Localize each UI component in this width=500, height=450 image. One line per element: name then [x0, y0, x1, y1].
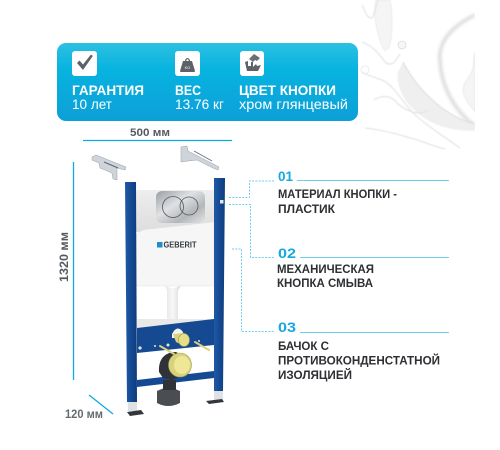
milk splash decoration — [361, 0, 475, 149]
callout 03: 03 — [278, 319, 296, 335]
callout 03: ИЗОЛЯЦИЕЙ — [278, 369, 352, 382]
callout 01 — [278, 168, 449, 216]
dimension: height 1320 mm: 1320 мм — [57, 232, 71, 282]
installation frame illustration — [92, 146, 225, 416]
black elbow — [159, 352, 187, 380]
heading: button colour — [239, 82, 348, 112]
callout 02: МЕХАНИЧЕСКАЯ — [277, 264, 374, 276]
tank body — [136, 222, 214, 286]
flush button plate — [156, 191, 205, 223]
callout 01: 01 — [278, 168, 293, 184]
wall bracket right — [181, 146, 219, 170]
yellow inlet fitting — [172, 328, 190, 346]
frame upper crossbar — [137, 319, 214, 353]
callout 03: ПРОТИВОКОНДЕНСТАТНОЙ — [278, 354, 440, 368]
callout 02 — [277, 245, 449, 290]
Geberit logo: GEBERIT — [164, 240, 197, 250]
dimension: width 500 mm: 500 мм — [130, 127, 170, 139]
yellow outlet fitting — [168, 353, 192, 377]
callout 01: МАТЕРИАЛ КНОПКИ - — [278, 189, 397, 201]
tank upper back — [136, 190, 214, 232]
heading: weight — [175, 82, 224, 112]
left foot — [127, 402, 144, 416]
callout 01: ПЛАСТИК — [278, 204, 336, 216]
icon: paint colour — [240, 51, 264, 76]
frame lower crossbar — [137, 371, 214, 387]
wall bracket left — [92, 155, 126, 180]
heading: warranty: ГАРАНТИЯ — [72, 82, 144, 98]
icon: check mark — [72, 51, 97, 76]
heading: button colour: ЦВЕТ КНОПКИ — [239, 82, 336, 98]
callout 02: КНОПКА СМЫВА — [277, 278, 373, 290]
callout leader lines — [229, 181, 274, 332]
heading: warranty: 10 лет — [72, 96, 113, 112]
black outlet socket — [157, 388, 180, 406]
callout 02: 02 — [278, 245, 296, 261]
heading: weight: ВЕС — [175, 82, 201, 98]
left frame post — [125, 182, 137, 402]
frame mounting holes — [138, 200, 224, 350]
right foot — [206, 391, 224, 404]
heading: weight: 13.76 кг — [175, 96, 224, 112]
right frame post — [214, 178, 225, 392]
heading: button colour: хром глянцевый — [239, 96, 348, 112]
dimension: depth 120 mm: 120 мм — [65, 407, 103, 421]
heading: warranty — [72, 82, 144, 112]
icon: weight: KG — [185, 65, 190, 70]
callout 03: БАЧОК С — [278, 341, 329, 353]
yellow rods — [160, 342, 209, 354]
drain pipe — [165, 285, 181, 324]
dimension: depth 120 mm — [65, 395, 113, 421]
callout 03 — [278, 319, 449, 382]
icon: weight — [175, 51, 200, 76]
panel: specifications — [57, 43, 358, 121]
